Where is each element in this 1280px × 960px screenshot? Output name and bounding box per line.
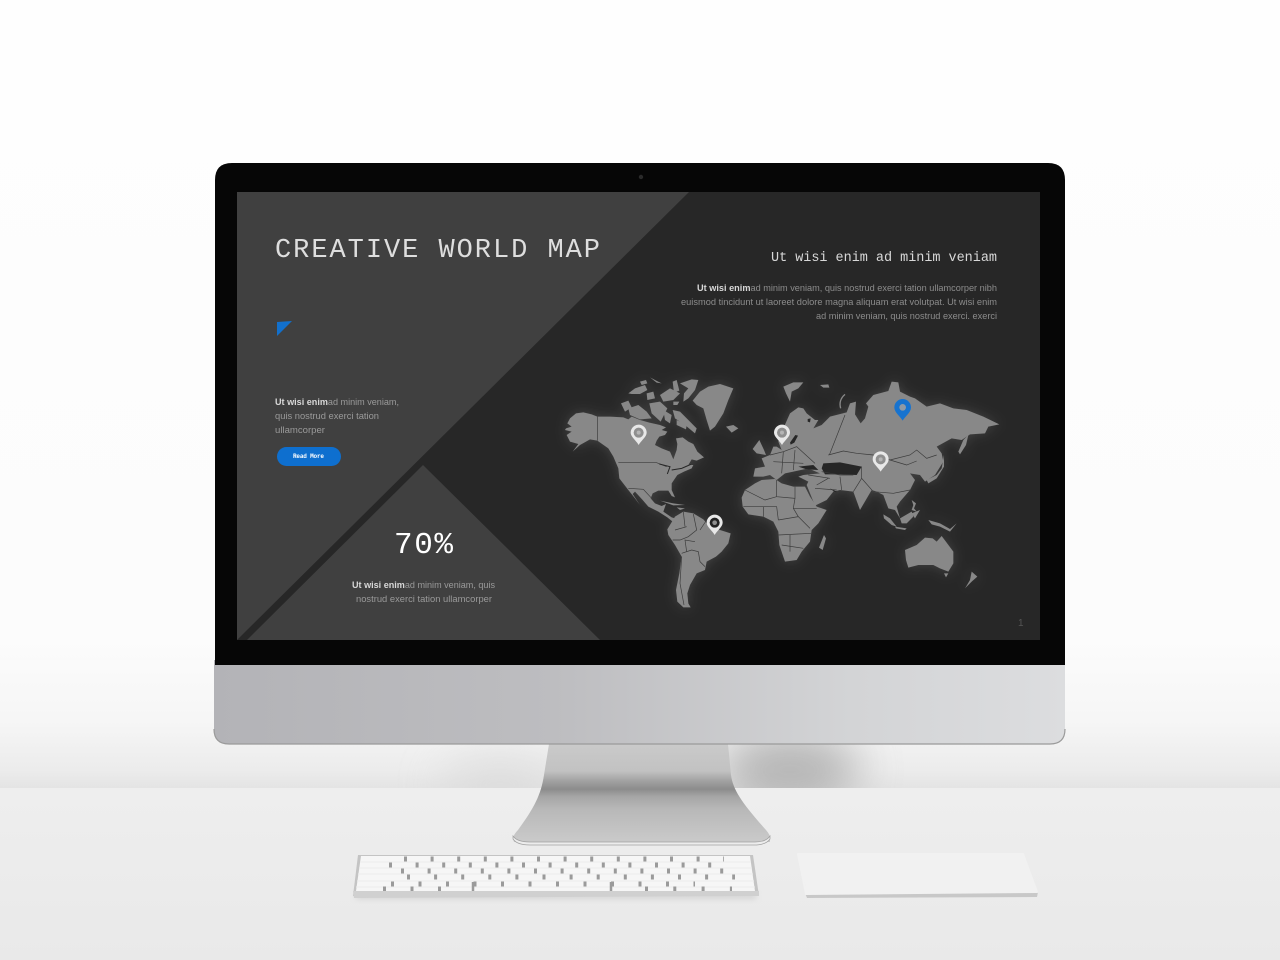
stat description: Ut wisi enimad minim veniam, quis <box>352 580 495 591</box>
trackpad surface <box>798 854 1037 894</box>
lower triangle panel <box>247 465 600 640</box>
large diagonal panel <box>237 192 689 640</box>
right text block: Ut wisi enimad minim veniam, quis nostrud exerci tation ullamcorper nibh <box>697 283 997 294</box>
title: CREATIVE WORLD MAP <box>275 236 600 266</box>
monitor chin <box>214 660 1065 744</box>
page number: 1 <box>1018 618 1024 629</box>
right text block <box>681 283 997 322</box>
stand base edge <box>513 836 770 845</box>
monitor bezel <box>215 163 1065 665</box>
continents <box>565 377 999 607</box>
wall shadow behind monitor <box>440 732 860 813</box>
read more button <box>277 447 341 466</box>
desk surface <box>0 788 1280 960</box>
keyboard shadow <box>356 893 756 899</box>
map pins <box>631 399 911 535</box>
north america <box>565 412 704 522</box>
slide screen <box>237 192 1040 640</box>
arctic islands <box>621 377 698 433</box>
slide background <box>237 192 1040 640</box>
percentage stat: 70% <box>394 528 453 563</box>
stat description: nostrud exerci tation ullamcorper <box>356 594 492 605</box>
right text block: ad minim veniam, quis nostrud exerci. exerci <box>816 311 997 322</box>
left text block <box>275 397 399 436</box>
keyboard body <box>353 855 759 896</box>
australia and new zealand <box>905 536 977 588</box>
americas <box>565 377 738 607</box>
camera <box>639 175 643 179</box>
trackpad edge <box>805 892 1038 898</box>
key row lines <box>356 862 755 887</box>
pin brazil <box>707 515 723 535</box>
monitor <box>214 163 1065 744</box>
stand body <box>513 744 770 842</box>
chin bottom edge <box>214 729 1065 744</box>
pin asia <box>873 451 889 472</box>
keyboard keys <box>356 856 755 891</box>
caribbean <box>660 501 685 510</box>
monitor stand <box>513 744 770 845</box>
great lakes <box>659 464 692 474</box>
pin canada <box>631 425 647 445</box>
left text block: Ut wisi enimad minim veniam, <box>275 397 399 408</box>
uk and islands <box>753 382 968 550</box>
accent triangle <box>277 321 292 336</box>
right heading: Ut wisi enim ad minim veniam <box>771 251 997 266</box>
trackpad <box>798 854 1038 898</box>
left text block: quis nostrud exerci tation <box>275 411 379 422</box>
read more button: Read More <box>293 453 324 460</box>
stat description <box>352 580 495 605</box>
novaya zemlya <box>840 394 845 408</box>
keyboard front edge <box>353 891 759 898</box>
country borders <box>743 415 937 552</box>
eurasia africa oceania <box>742 382 999 588</box>
pin russia <box>894 399 911 421</box>
left text block: ullamcorper <box>275 425 325 436</box>
dark inland seas <box>790 418 862 492</box>
american borders <box>597 417 707 605</box>
keyboard <box>353 855 759 899</box>
world map <box>565 377 999 607</box>
pin europe <box>774 425 790 445</box>
africa <box>742 479 827 562</box>
iceland <box>726 425 738 433</box>
greenland <box>693 384 733 431</box>
eurasia <box>753 382 999 518</box>
key gaps <box>383 859 735 891</box>
right text block: euismod tincidunt ut laoreet dolore magna aliquam erat volutpat. Ut wisi enim <box>681 297 997 308</box>
south america <box>667 512 731 607</box>
